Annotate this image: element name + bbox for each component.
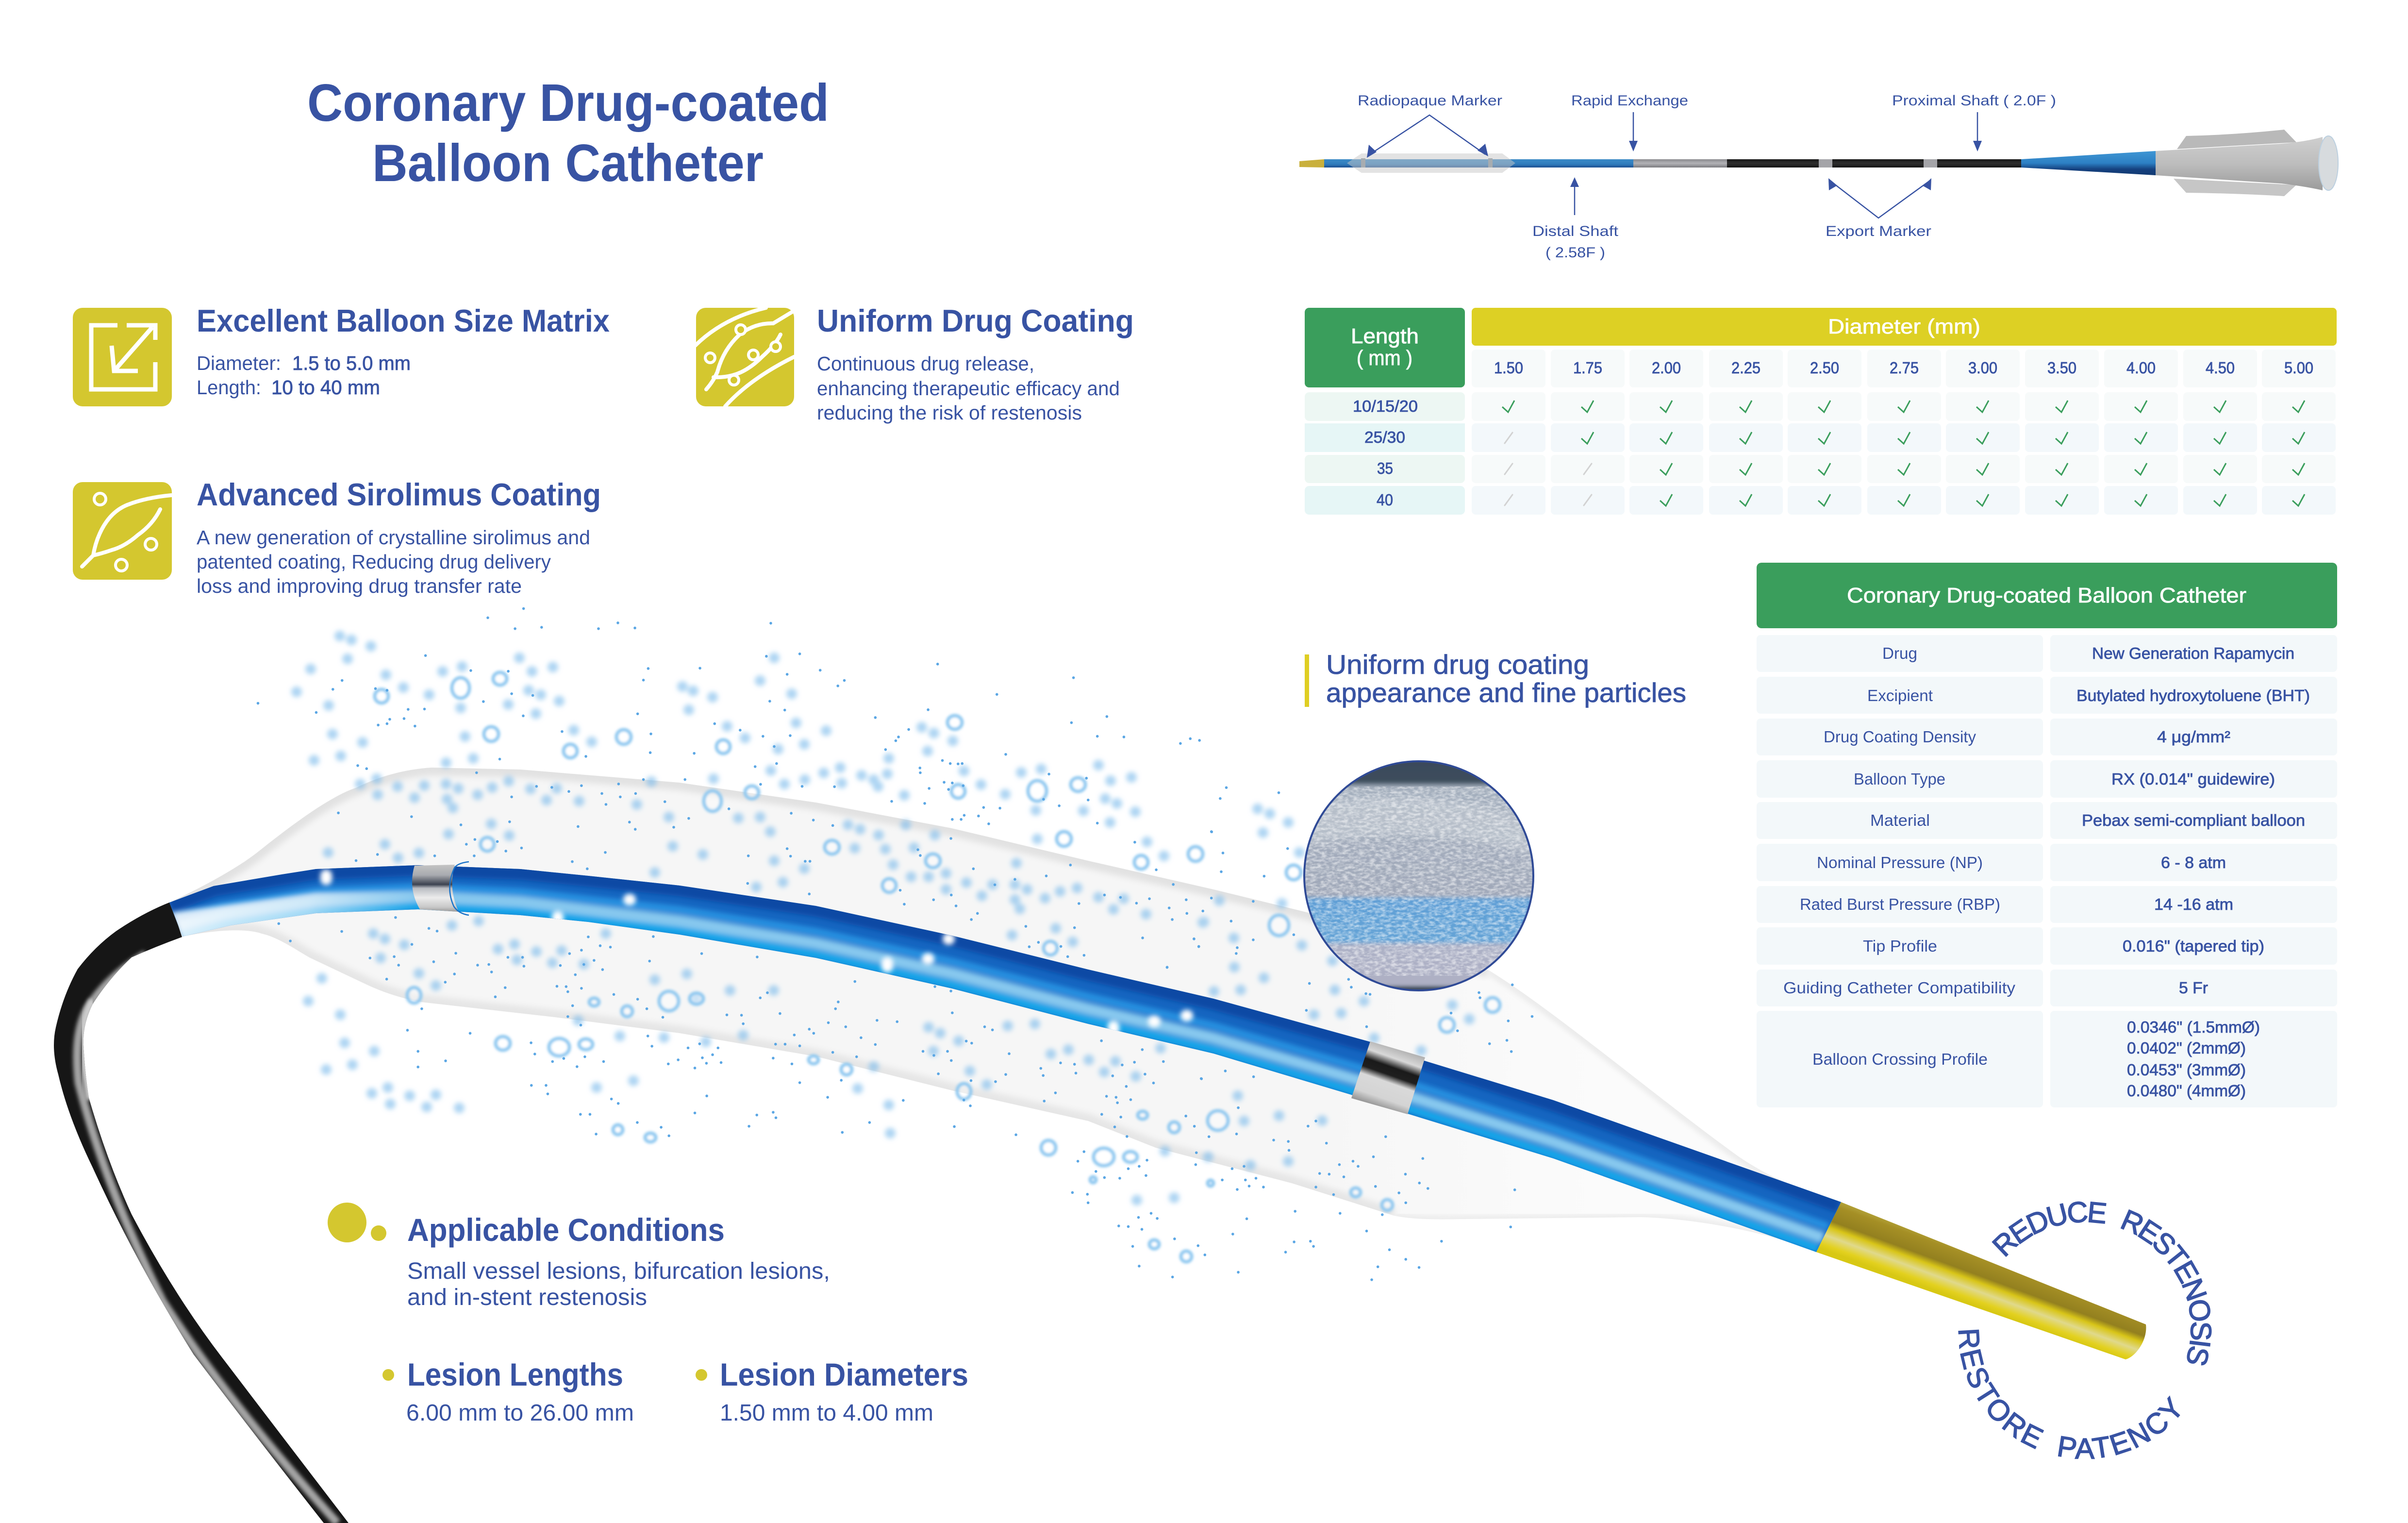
table parameter values: 4 μg/mm²	[2157, 728, 2230, 746]
text: coating description	[817, 352, 1120, 424]
table parameter names: Excipient	[1867, 686, 1933, 704]
table parameter names: Drug	[1882, 644, 1917, 662]
table parameter values: 0.0402" (2mmØ)	[2127, 1039, 2246, 1057]
text: size ranges	[197, 352, 411, 399]
bullet: double dot	[328, 1203, 386, 1242]
header: length: ( mm )	[1357, 346, 1412, 370]
label: distal shaft: ( 2.58F )	[1545, 245, 1605, 261]
panel: applicable conditions	[328, 1203, 830, 1310]
table parameter values: Pebax semi-compliant balloon	[2082, 811, 2305, 829]
table parameter values: Butylated hydroxytoluene (BHT)	[2076, 686, 2310, 704]
heading: balloon size matrix: Excellent Balloon Size Matrix	[197, 303, 610, 338]
header row: diameter values: 1.50	[1494, 359, 1523, 377]
icon: leaf with particles	[73, 482, 172, 580]
panel: lesion diameters: 1.50 mm to 4.00 mm	[720, 1400, 933, 1426]
header row: diameter values: 4.00	[2126, 359, 2156, 377]
table: size matrix	[1305, 308, 2337, 515]
text: coating description: enhancing therapeutic efficacy and	[817, 377, 1120, 400]
row: 10/15/20	[1305, 392, 2336, 421]
label: proximal shaft	[1892, 93, 2056, 151]
icon: expand arrow	[73, 308, 172, 406]
label: radiopaque marker: Radiopaque Marker	[1358, 93, 1502, 109]
particles: small dots, right	[1072, 787, 1532, 1280]
table parameter names: Drug Coating Density	[1824, 728, 1976, 746]
header row: diameter values: 5.00	[2284, 359, 2313, 377]
label: rapid exchange: Rapid Exchange	[1571, 93, 1688, 109]
row: 25/30: 25/30	[1364, 428, 1405, 446]
icon: coated leaf	[695, 308, 794, 406]
catheter shaft	[165, 859, 1849, 1257]
table header: Coronary Drug-coated Balloon Catheter	[1847, 584, 2246, 607]
row: 10/15/20: 10/15/20	[1353, 397, 1418, 415]
particles: small dots, middle	[685, 623, 1212, 1137]
panel: lesion lengths	[382, 1356, 634, 1426]
row: 35	[1305, 455, 2336, 483]
table parameter values	[2076, 644, 2310, 1100]
text: conditions description: Small vessel lesions, bifurcation lesions,	[407, 1258, 830, 1284]
gold tip	[1816, 1202, 2146, 1359]
table row backgrounds	[1757, 635, 2337, 1107]
table parameter values: 5 Fr	[2179, 979, 2208, 997]
label: distal shaft: Distal Shaft	[1532, 223, 1619, 239]
header row: diameter values: 2.50	[1810, 359, 1839, 377]
circular slogan	[1958, 1201, 2212, 1459]
label: rapid exchange	[1571, 93, 1688, 151]
marker band: proximal	[412, 862, 469, 915]
header: diameter	[1472, 308, 2337, 346]
illustration: drug-coated balloon with particles	[44, 609, 2146, 1523]
particles: soft blobs	[297, 636, 1469, 1200]
label: proximal shaft: Proximal Shaft ( 2.0F )	[1892, 93, 2056, 109]
title	[307, 73, 829, 193]
row: 25/30	[1305, 423, 2336, 452]
label: export marker	[1826, 178, 1931, 239]
table parameter values: 0.016" (tapered tip)	[2123, 937, 2264, 955]
header row: diameter values	[1472, 350, 2336, 387]
table parameter names: Rated Burst Pressure (RBP)	[1800, 895, 2000, 913]
table parameter names: Balloon Type	[1854, 770, 1945, 788]
text: size ranges: 10 to 40 mm	[271, 376, 380, 399]
table parameter values: 0.0346" (1.5mmØ)	[2127, 1018, 2260, 1036]
header row: diameter values: 2.25	[1731, 359, 1760, 377]
text: size ranges: Length:	[197, 376, 261, 399]
table parameter values: 0.0453" (3mmØ)	[2127, 1061, 2246, 1079]
text: sirolimus description: patented coating, Reducing drug delivery	[197, 551, 551, 573]
panel: uniform drug coating	[695, 303, 1134, 424]
table parameter values: 14 -16 atm	[2154, 895, 2233, 913]
row: 35: 35	[1377, 459, 1393, 477]
table parameter values: 6 - 8 atm	[2161, 854, 2226, 871]
callout: uniform drug coating heading: appearance and fine particles	[1326, 677, 1686, 708]
header row: diameter values: 2.75	[1890, 359, 1919, 377]
panel: lesion diameters	[696, 1356, 968, 1426]
balloon body	[165, 762, 1849, 1257]
table parameter names: Tip Profile	[1863, 937, 1937, 955]
callout: uniform drug coating heading	[1305, 649, 1686, 708]
table parameter values: RX (0.014" guidewire)	[2111, 770, 2275, 788]
table parameter names: Guiding Catheter Compatibility	[1783, 979, 2016, 997]
header row: diameter values: 3.50	[2047, 359, 2076, 377]
illustration: catheter body and hub	[1299, 130, 2338, 196]
header: diameter: Diameter (mm)	[1828, 315, 1980, 338]
header: length: Length	[1351, 324, 1419, 348]
text: size ranges: 1.5 to 5.0 mm	[292, 352, 411, 374]
text: size ranges: Diameter:	[197, 352, 281, 374]
panel: lesion lengths: Lesion Lengths	[407, 1356, 623, 1392]
title: Balloon Catheter	[372, 134, 764, 193]
heading: applicable conditions: Applicable Conditions	[407, 1212, 725, 1248]
table: specifications	[1757, 563, 2337, 1107]
panel: advanced sirolimus coating	[73, 477, 601, 597]
table parameter names: Material	[1870, 811, 1930, 829]
guide wire	[44, 893, 359, 1523]
particles: rings	[375, 672, 1500, 1262]
text: conditions description	[407, 1258, 830, 1310]
diagram: catheter overview	[1299, 93, 2338, 261]
label: radiopaque marker	[1358, 93, 1502, 158]
text: coating description: Continuous drug release,	[817, 352, 1034, 375]
table parameter values: New Generation Rapamycin	[2092, 644, 2294, 662]
heading: sirolimus coating: Advanced Sirolimus Coating	[197, 477, 601, 512]
text: sirolimus description: loss and improving drug transfer rate	[197, 575, 522, 597]
header row: diameter values: 2.00	[1652, 359, 1681, 377]
header row: diameter values: 1.75	[1573, 359, 1602, 377]
row: 40: 40	[1377, 491, 1393, 509]
table parameter names: Balloon Crossing Profile	[1812, 1050, 1988, 1068]
row: 40	[1305, 486, 2336, 515]
text: restore patency: RESTORE PATENCY	[1958, 1329, 2180, 1459]
particles: small dots, left	[258, 609, 678, 1136]
header: length	[1305, 308, 1465, 387]
panel: excellent balloon size matrix	[73, 303, 610, 406]
panel: lesion lengths: 6.00 mm to 26.00 mm	[406, 1400, 634, 1426]
table parameter values: 0.0480" (4mmØ)	[2127, 1082, 2246, 1100]
text: reduce restenosis: REDUCE RESTENOSIS	[1992, 1201, 2212, 1365]
panel: lesion diameters: Lesion Diameters	[720, 1356, 968, 1392]
callout: uniform drug coating heading: Uniform drug coating	[1326, 649, 1589, 680]
header row: diameter values: 4.50	[2206, 359, 2235, 377]
table parameter names	[1783, 644, 2016, 1068]
label: export marker: Export Marker	[1826, 223, 1931, 239]
header row: diameter values: 3.00	[1968, 359, 1997, 377]
table parameter names: Nominal Pressure (NP)	[1817, 854, 1983, 871]
inset: coating micrograph	[1301, 757, 1539, 995]
text: conditions description: and in-stent restenosis	[407, 1285, 647, 1310]
text: coating description: reducing the risk of restenosis	[817, 402, 1082, 424]
table header	[1757, 563, 2337, 628]
text: sirolimus description: A new generation of crystalline sirolimus and	[197, 526, 590, 549]
label: distal shaft	[1532, 177, 1619, 261]
marker band: distal	[1351, 1041, 1425, 1114]
text: sirolimus description	[197, 526, 590, 597]
title: Coronary Drug-coated	[307, 73, 829, 133]
heading: uniform drug coating: Uniform Drug Coating	[817, 303, 1134, 338]
